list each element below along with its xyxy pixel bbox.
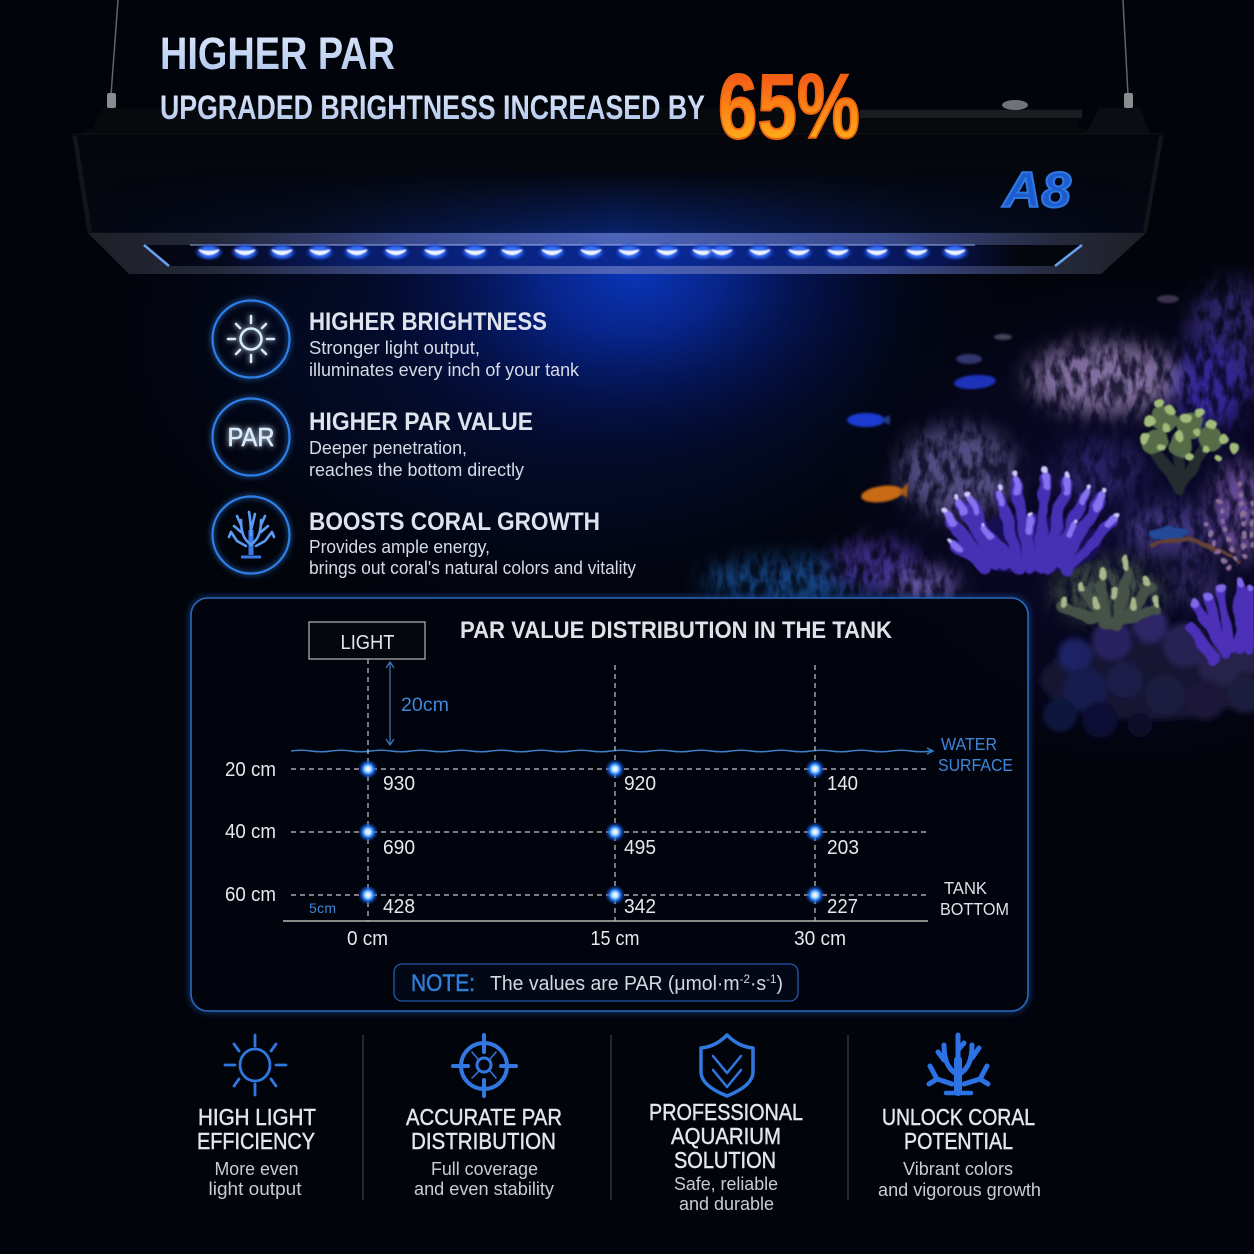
water surface label: SURFACE <box>938 755 1013 775</box>
tank bottom label <box>940 878 1009 919</box>
width labels: 30 cm <box>794 928 846 950</box>
description: brings out coral's natural colors and vitality <box>309 558 636 578</box>
tank bottom label: BOTTOM <box>940 899 1009 919</box>
PAR values: 227 <box>827 896 858 918</box>
title: HIGHER PAR <box>160 28 395 79</box>
data points <box>358 759 825 905</box>
tank bottom line <box>283 920 928 922</box>
heading: DISTRIBUTION <box>411 1128 556 1154</box>
panel: PAR value distribution <box>191 598 1028 1011</box>
description: Vibrant colors <box>903 1159 1013 1179</box>
width labels <box>347 928 846 950</box>
window corner highlights <box>144 245 1082 266</box>
note box: The values are PAR (μmol·m <box>490 973 747 995</box>
width labels: 15 cm <box>590 928 640 950</box>
note box <box>394 964 798 1001</box>
note box: ) <box>777 973 783 995</box>
PAR values: 920 <box>624 773 656 795</box>
depth labels: 60 cm <box>225 884 276 906</box>
lamp tray <box>88 233 1146 274</box>
PAR values: 140 <box>827 773 858 795</box>
description: More even <box>214 1159 298 1179</box>
lamp underglow <box>198 176 1042 233</box>
depth labels: 20 cm <box>225 759 276 781</box>
fish blue 2 <box>954 374 996 390</box>
lamp <box>73 0 1163 274</box>
heading: PROFESSIONAL <box>649 1099 803 1125</box>
water surface label <box>938 734 1013 775</box>
panel glow <box>191 598 1028 1011</box>
heading: UNLOCK CORAL <box>882 1104 1035 1130</box>
grid lines <box>291 659 928 921</box>
water surface label: WATER <box>941 734 997 754</box>
PAR values: 495 <box>624 837 656 859</box>
purple staghorn coral <box>944 467 1118 575</box>
fish blue <box>847 413 890 427</box>
heading: BOOSTS CORAL GROWTH <box>309 508 600 536</box>
subtitle: UPGRADED BRIGHTNESS INCREASED BY <box>160 89 705 127</box>
description: Provides ample energy, <box>309 537 490 557</box>
right purple coral <box>1188 585 1250 660</box>
green coral <box>1140 399 1239 490</box>
feature: higher brightness <box>212 300 580 380</box>
note box: NOTE: <box>411 970 475 997</box>
icon: target <box>453 1035 516 1096</box>
icon: coral <box>929 1035 988 1093</box>
PAR values: 690 <box>383 837 415 859</box>
swirl coral <box>1148 526 1240 565</box>
icon: PAR circle <box>212 398 290 476</box>
feature: higher par value <box>212 398 533 480</box>
LEDs <box>194 243 970 261</box>
depth labels <box>225 759 276 906</box>
description: reaches the bottom directly <box>309 460 524 480</box>
light beam <box>217 274 929 554</box>
description: Safe, reliable <box>674 1174 778 1194</box>
description: illuminates every inch of your tank <box>309 360 580 380</box>
mottled reef texture <box>700 280 1254 620</box>
light box <box>309 622 425 659</box>
dark foreground mound <box>1040 607 1254 738</box>
fish orange <box>860 483 908 505</box>
note box: -1 <box>766 972 777 986</box>
heading: EFFICIENCY <box>197 1128 315 1154</box>
reef shadow mound <box>810 260 1254 780</box>
chart title: PAR VALUE DISTRIBUTION IN THE TANK <box>460 617 893 644</box>
description: Deeper penetration, <box>309 438 467 458</box>
panel frame <box>191 598 1028 1011</box>
distance arrow 20cm <box>386 662 449 745</box>
feature: boosts coral growth <box>212 496 636 578</box>
coral reef <box>700 260 1254 780</box>
description: and vigorous growth <box>878 1180 1041 1200</box>
heading: SOLUTION <box>674 1147 776 1173</box>
description: light output <box>208 1179 302 1199</box>
5cm label: 5cm <box>309 900 336 916</box>
PAR values: 203 <box>827 837 859 859</box>
icon: sun in circle <box>212 300 290 378</box>
PAR values: 930 <box>383 773 415 795</box>
benefit: accurate par distribution <box>406 1035 562 1199</box>
benefit: unlock coral potential <box>878 1035 1041 1200</box>
right pink coral tips <box>1205 478 1252 570</box>
lens window <box>144 245 1082 266</box>
PAR values: 428 <box>383 896 415 918</box>
mounts and knob <box>107 93 1133 110</box>
light box: LIGHT <box>340 632 394 654</box>
green lower coral <box>1062 560 1155 625</box>
depth labels: 40 cm <box>225 821 276 843</box>
description: and even stability <box>414 1179 554 1199</box>
lamp side edge highlights <box>75 136 1161 232</box>
description: and durable <box>679 1194 774 1214</box>
width labels: 0 cm <box>347 928 388 950</box>
icon: sun <box>225 1035 286 1095</box>
lamp body <box>73 134 1163 233</box>
window top light line <box>190 244 975 246</box>
heading: HIGHER BRIGHTNESS <box>309 308 547 336</box>
PAR values: 342 <box>624 896 656 918</box>
suspension wires <box>111 0 1128 95</box>
water surface line <box>291 748 933 754</box>
note box: -2 <box>740 972 750 986</box>
description: Stronger light output, <box>309 338 480 358</box>
fish dim <box>956 295 1179 364</box>
benefit: professional aquarium solution <box>649 1035 803 1214</box>
heading: AQUARIUM <box>671 1123 781 1149</box>
heading: HIGH LIGHT <box>198 1104 316 1130</box>
distance arrow 20cm: 20cm <box>401 695 449 716</box>
heading: ACCURATE PAR <box>406 1104 562 1130</box>
heading: HIGHER PAR VALUE <box>309 408 533 436</box>
icon: PAR circle: PAR <box>228 422 274 452</box>
benefit: high light efficiency <box>197 1035 316 1199</box>
A8 logo: A8 <box>1001 162 1071 218</box>
description: Full coverage <box>431 1159 538 1179</box>
PAR values <box>383 773 859 918</box>
heading: POTENTIAL <box>904 1128 1013 1154</box>
top rail <box>80 108 1150 134</box>
note box: ·s <box>750 973 766 995</box>
tank bottom label: TANK <box>944 878 987 898</box>
column dividers <box>363 1035 848 1200</box>
icon: coral circle <box>212 496 290 574</box>
65 percent callout: 65% <box>718 56 860 158</box>
icon: shield <box>701 1035 753 1096</box>
right purple coral tips <box>1190 578 1254 607</box>
